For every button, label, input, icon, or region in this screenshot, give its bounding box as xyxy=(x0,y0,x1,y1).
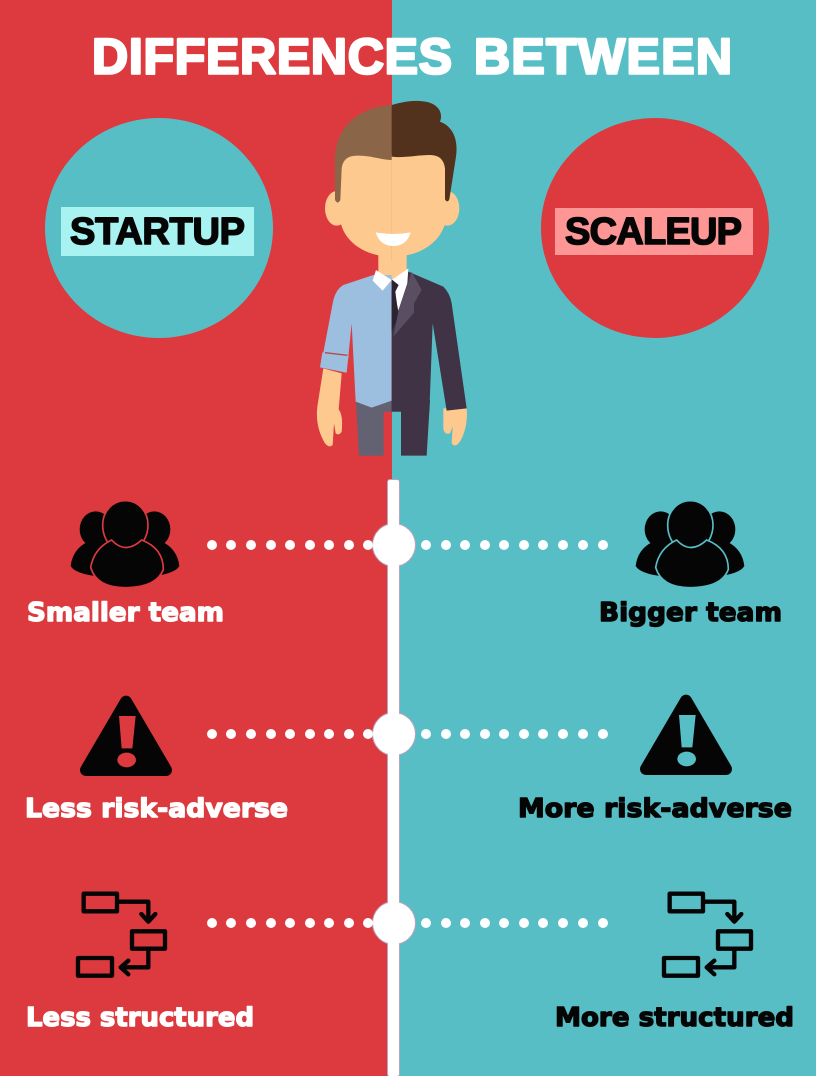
dotted connector row 2 xyxy=(207,729,608,739)
dotted connector row 1 xyxy=(207,540,608,550)
hair left xyxy=(335,105,392,202)
tie xyxy=(392,279,399,332)
badge: scaleup: SCALEUP xyxy=(565,211,742,253)
label: smaller team: Smaller team xyxy=(27,598,224,628)
badge: startup xyxy=(45,118,273,338)
collar xyxy=(373,268,408,311)
shirt xyxy=(321,275,392,408)
head xyxy=(340,153,446,257)
label: more risk-adverse: More risk-adverse xyxy=(518,794,792,824)
icon: big team xyxy=(636,501,744,588)
panel: startup background xyxy=(0,0,392,1076)
icon: flow chart right xyxy=(664,894,751,976)
smile xyxy=(376,232,411,246)
title xyxy=(92,28,732,84)
label: more structured: More structured xyxy=(555,1003,794,1033)
icon: warning left xyxy=(86,702,166,770)
legs xyxy=(356,400,430,456)
panel: scaleup background xyxy=(392,0,816,1076)
icon: flow chart left xyxy=(78,894,165,976)
badge: startup: STARTUP xyxy=(70,211,245,253)
ears xyxy=(325,191,459,226)
arms skin xyxy=(317,368,467,446)
icon: warning right xyxy=(646,701,726,769)
lapel xyxy=(393,272,422,337)
label: less risk-adverse: Less risk-adverse xyxy=(25,794,288,824)
jacket xyxy=(392,272,467,412)
hair right xyxy=(392,101,457,201)
title: BETWEEN xyxy=(474,28,732,84)
dotted connector row 3 xyxy=(207,918,608,928)
label: less structured: Less structured xyxy=(26,1003,254,1033)
character: half casual, half suit xyxy=(317,101,467,456)
central timeline xyxy=(373,480,415,1076)
rolled cuff xyxy=(320,352,349,373)
face centre line xyxy=(391,157,393,260)
label: bigger team: Bigger team xyxy=(599,598,782,628)
badge: scaleup xyxy=(541,118,769,338)
icon: small team xyxy=(71,501,179,588)
title: DIFFERENCES xyxy=(92,28,452,84)
neck xyxy=(378,247,407,280)
